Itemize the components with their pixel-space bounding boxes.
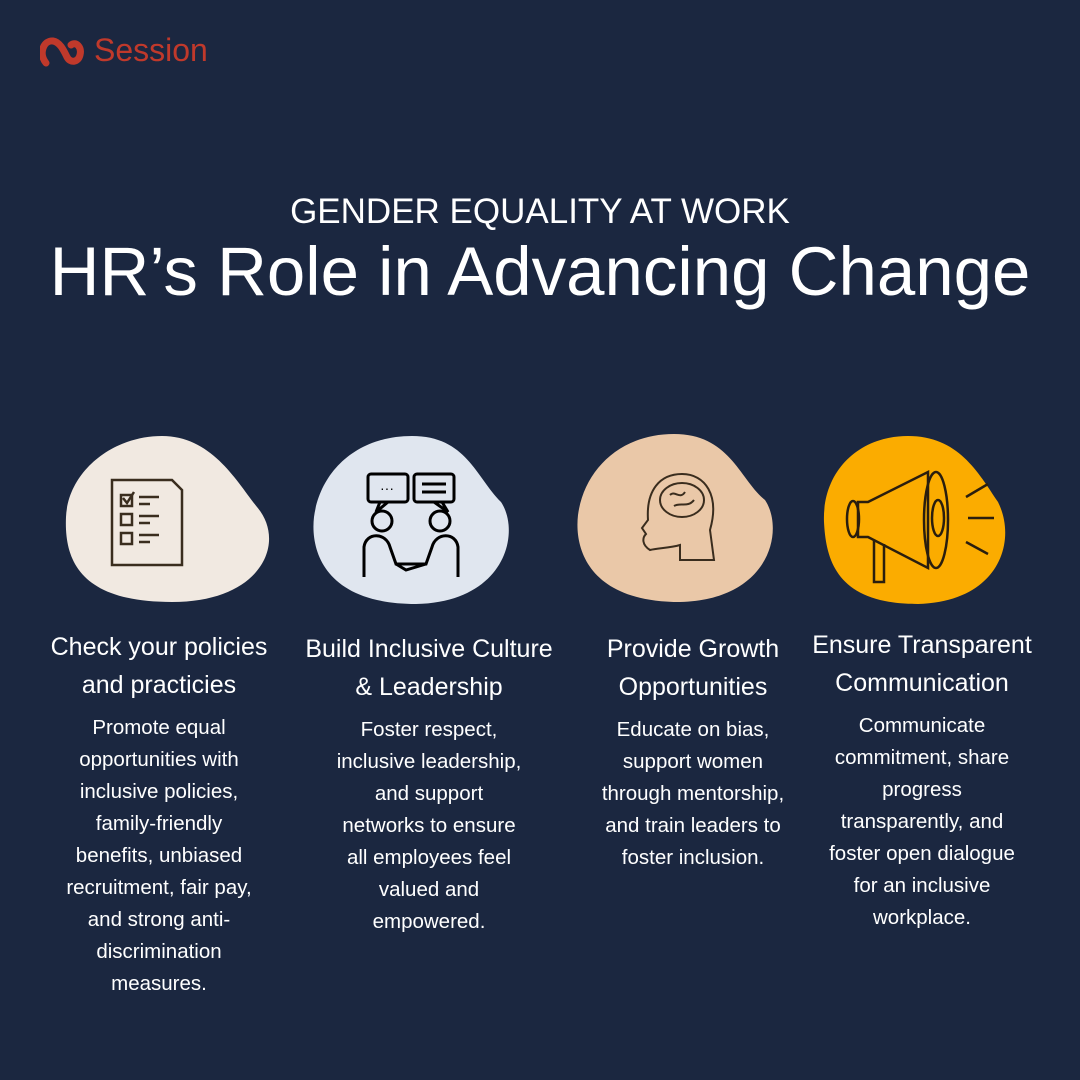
title: HR’s Role in Advancing Change <box>50 233 1030 310</box>
heading: Opportunities <box>619 673 767 701</box>
icon: checklist blob <box>66 436 270 602</box>
panel: culture <box>305 635 553 933</box>
icon: logo mark <box>40 38 84 66</box>
panel: policies <box>51 633 267 995</box>
text block: networks to ensure <box>342 814 516 837</box>
text block: discrimination <box>96 940 222 963</box>
icon: people talking blob: ··· <box>380 480 394 496</box>
text block <box>66 716 252 995</box>
text block <box>602 718 784 869</box>
heading: Ensure Transparent <box>812 631 1032 659</box>
heading <box>812 631 1032 697</box>
text block: opportunities with <box>79 748 239 771</box>
heading: Communication <box>835 669 1009 697</box>
text block: benefits, unbiased <box>76 844 242 867</box>
text block: and support <box>375 782 483 805</box>
icon: brain head blob <box>577 434 773 602</box>
text block: through mentorship, <box>602 782 784 805</box>
text block: inclusive policies, <box>80 780 238 803</box>
text block: workplace. <box>873 906 971 929</box>
text block: empowered. <box>373 910 485 933</box>
text block: and train leaders to <box>605 814 781 837</box>
heading <box>607 635 779 701</box>
text block: recruitment, fair pay, <box>66 876 252 899</box>
text block: support women <box>623 750 763 773</box>
heading: Build Inclusive Culture <box>305 635 553 663</box>
heading: and practicies <box>82 671 236 699</box>
text block: all employees feel <box>347 846 511 869</box>
text block: foster inclusion. <box>622 846 764 869</box>
text block: transparently, and <box>841 810 1003 833</box>
text block: family-friendly <box>96 812 222 835</box>
panel: growth <box>602 635 784 869</box>
logo <box>40 32 208 68</box>
text block <box>337 718 521 933</box>
heading <box>51 633 267 699</box>
text block: progress <box>882 778 962 801</box>
text block: Educate on bias, <box>617 718 769 741</box>
text block: Communicate <box>859 714 985 737</box>
heading: & Leadership <box>355 673 503 701</box>
subtitle: GENDER EQUALITY AT WORK <box>290 192 790 231</box>
text block: commitment, share <box>835 746 1009 769</box>
text block: Promote equal <box>92 716 226 739</box>
text block: inclusive leadership, <box>337 750 521 773</box>
logo text: Session <box>94 32 208 68</box>
text block: measures. <box>111 972 207 995</box>
icon: people talking blob <box>313 436 509 604</box>
heading <box>305 635 553 701</box>
text block: for an inclusive <box>854 874 990 897</box>
text block: valued and <box>379 878 479 901</box>
icon: megaphone blob <box>824 436 1006 604</box>
text block: Foster respect, <box>361 718 497 741</box>
panel: communication <box>812 631 1032 929</box>
text block <box>829 714 1015 929</box>
heading: Provide Growth <box>607 635 779 663</box>
text block: foster open dialogue <box>829 842 1015 865</box>
heading: Check your policies <box>51 633 267 661</box>
text block: and strong anti- <box>88 908 230 931</box>
